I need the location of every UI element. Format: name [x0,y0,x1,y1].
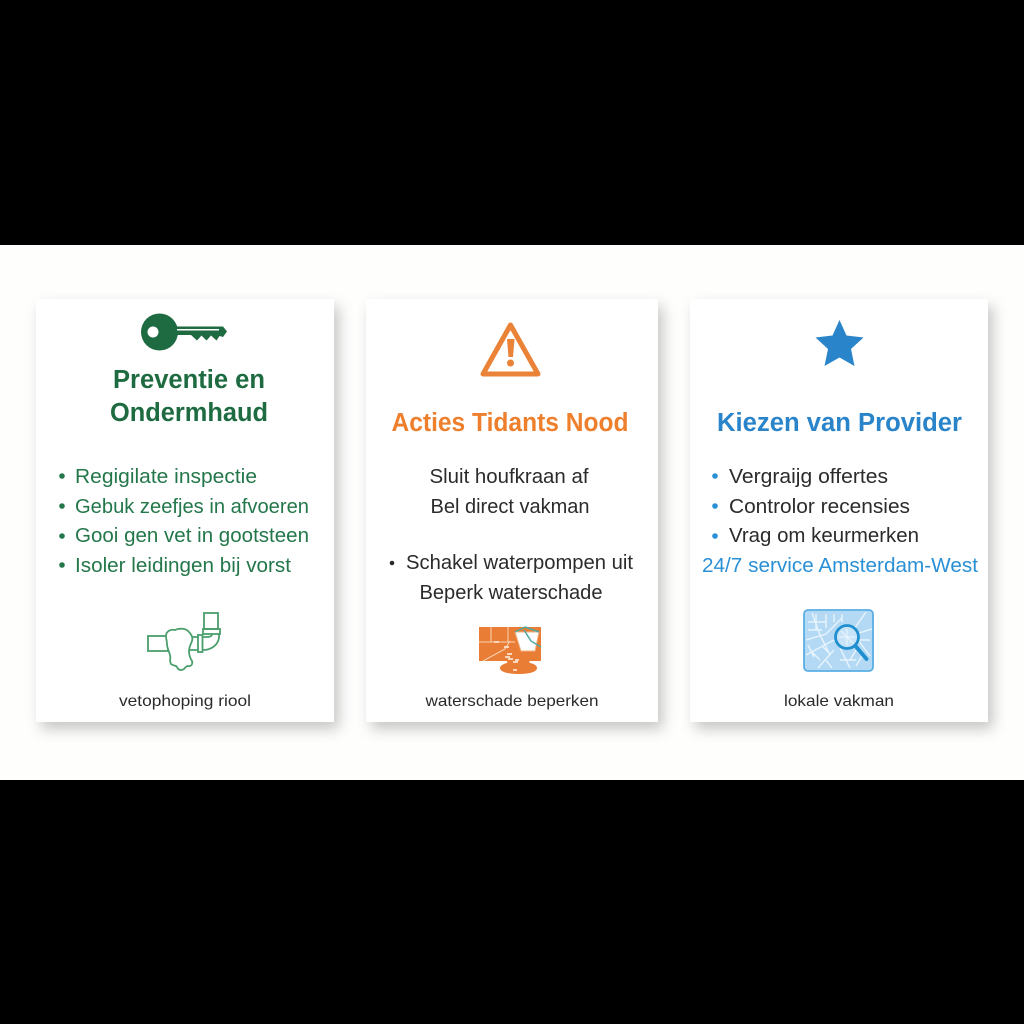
bullet list: provider [702,465,978,577]
heading: Kiezen van Provider: Kiezen van Provider [717,409,962,437]
icon: key [141,314,227,350]
bullet list: provider: 24/7 service Amsterdam-West [702,554,978,577]
bullet list: preventie: Gooi gen vet in gootsteen [75,524,309,547]
caption: lokale vakman: lokale vakman [784,693,894,710]
bullet list: preventie: Isoler leidingen bij vorst [75,554,291,577]
caption: vetophoping riool: vetophoping riool [119,693,251,710]
text block: nood acties [390,465,633,604]
heading: Preventie en Ondermhaud: Ondermhaud [110,399,268,427]
heading: Acties Tidants Nood: Acties Tidants Nood [392,409,628,437]
panel: Preventie en Onderhoud [36,299,334,722]
panel: Acties Tijdens Nood [366,299,658,722]
bullet list: provider: Vrag om keurmerken [729,524,919,547]
bullet list: provider: Vergraijg offertes [729,465,888,488]
icon: clogged pipe [148,613,220,670]
text block: nood acties: Sluit houfkraan af [430,465,589,488]
heading: Preventie en Ondermhaud: Preventie en [113,366,265,394]
icon: water damage with bucket [479,627,541,674]
text block: nood acties: Schakel waterpompen uit [406,551,633,574]
icon: warning triangle [483,325,538,374]
white background band [0,245,1024,780]
caption: waterschade beperken: waterschade beperken [424,693,598,710]
bullet list: preventie: Regigilate inspectie [75,465,257,488]
icon: star [816,320,864,366]
bullet list: provider: Controlor recensies [729,495,910,518]
icon: map with magnifier [804,610,873,671]
text block: nood acties: Beperk waterschade [420,581,602,604]
bullet list: preventie: Gebuk zeefjes in afvoeren [75,495,309,518]
bullet list: preventie [59,465,309,577]
text block: nood acties: Bel direct vakman [430,495,590,518]
panel: Kiezen van Provider [690,299,988,722]
